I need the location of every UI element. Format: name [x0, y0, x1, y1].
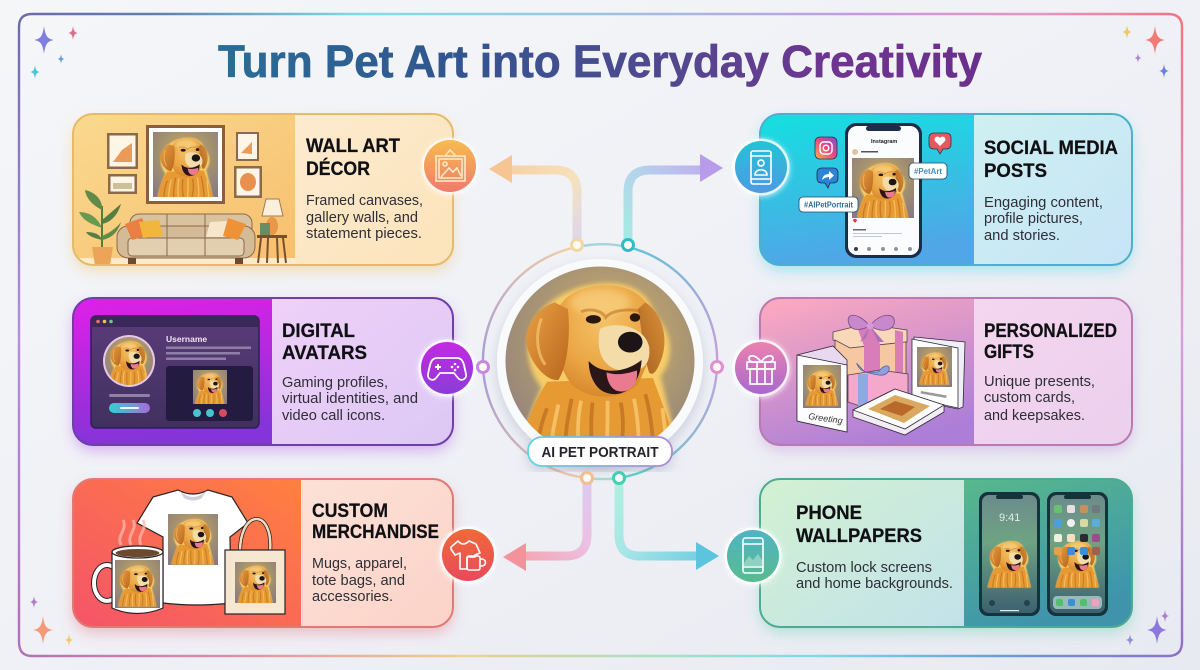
text: wall art decor: WALL ART	[306, 135, 400, 157]
panel: custom merchandise	[73, 479, 453, 627]
text: digital avatars: AVATARS	[282, 342, 367, 364]
lying photo book	[853, 389, 944, 435]
illustration: tote bag	[225, 519, 285, 614]
illustration: gifts, card and books	[797, 315, 965, 435]
hashtag bubble: PetArt	[909, 163, 947, 179]
text: personalized gifts: Unique presents,	[984, 374, 1095, 390]
text: social media posts: Engaging content,	[984, 195, 1103, 211]
icon: share bubble	[817, 168, 838, 188]
center label: AI PET PORTRAIT	[542, 445, 659, 461]
panel: personalized gifts	[760, 298, 1132, 445]
text: digital avatars: virtual identities, and	[282, 391, 418, 407]
icon: merchandise tee and mug	[440, 526, 496, 584]
icon: wall art picture frame	[422, 138, 478, 194]
illustration: gallery wall and living room	[79, 125, 287, 265]
text: social media posts: SOCIAL MEDIA	[984, 137, 1118, 159]
illustration: profile window	[91, 316, 259, 428]
text: digital avatars	[282, 320, 418, 424]
sofa	[117, 214, 255, 264]
text: custom merchandise: CUSTOM	[312, 500, 388, 522]
icon: instagram badge	[815, 137, 837, 159]
hashtag bubble: AIPetPortrait	[799, 197, 858, 212]
plant	[79, 190, 121, 265]
text: wall art decor: DÉCOR	[306, 157, 370, 180]
illustration: phone with social feed	[799, 123, 951, 258]
illustration: lock screen phone	[979, 492, 1040, 616]
text: phone wallpapers: WALLPAPERS	[796, 525, 922, 547]
decorative sparkles: top right	[1122, 25, 1169, 78]
text: wall art decor	[306, 135, 423, 242]
center orbit ring	[483, 244, 717, 479]
text: personalized gifts: and keepsakes.	[984, 408, 1085, 424]
panel: digital avatars	[73, 298, 453, 445]
upright photo book	[912, 337, 965, 409]
icon: digital avatars game controller	[418, 340, 476, 396]
illustration: t-shirt	[137, 490, 248, 605]
text: custom merchandise: MERCHANDISE	[312, 521, 439, 543]
illustration: lock screen phone: 9:41	[999, 512, 1020, 524]
dog portrait	[525, 280, 674, 436]
panel: social media posts	[760, 114, 1132, 265]
text: personalized gifts	[984, 320, 1117, 424]
lamp and side table	[257, 199, 287, 263]
text: custom merchandise: Mugs, apparel,	[312, 556, 407, 572]
icon: phone wallpaper	[724, 528, 782, 584]
arrow: center to social media	[628, 154, 723, 245]
arrow: center to wall art	[489, 155, 577, 245]
text: phone wallpapers	[796, 502, 953, 592]
text: custom merchandise: accessories.	[312, 589, 393, 605]
text: social media posts: and stories.	[984, 228, 1060, 244]
icon: gift box	[732, 340, 790, 396]
text: digital avatars: DIGITAL	[282, 320, 355, 342]
icon: heart bubble	[929, 133, 951, 154]
text: custom merchandise	[312, 500, 439, 605]
center portrait medallion	[497, 259, 703, 465]
decorative sparkles: top left	[30, 26, 78, 79]
text: wall art decor: Framed canvases,	[306, 193, 423, 209]
large framed dog portrait	[146, 125, 225, 204]
arrow: center to phone wallpapers	[619, 478, 719, 570]
hashtag bubble: PetArt: #PetArt	[914, 167, 942, 176]
panel: wall art decor	[73, 114, 453, 265]
text: digital avatars: Gaming profiles,	[282, 375, 388, 391]
text: phone wallpapers: PHONE	[796, 502, 862, 524]
avatar	[103, 335, 155, 387]
center label	[528, 437, 672, 466]
greeting card: Greeting	[808, 411, 843, 426]
decorative sparkles: bottom left	[30, 596, 73, 646]
arrow: center to custom merchandise	[503, 478, 587, 571]
text: social media posts: profile pictures,	[984, 211, 1083, 227]
small gift box	[848, 364, 908, 408]
text: social media posts	[984, 137, 1118, 244]
illustration: profile window: Username	[166, 334, 207, 344]
text: wall art decor: statement pieces.	[306, 226, 422, 242]
text: social media posts: POSTS	[984, 160, 1047, 182]
text: wall art decor: gallery walls, and	[306, 210, 418, 226]
illustration: phone with social feed: Instagram	[871, 139, 897, 145]
text: personalized gifts: custom cards,	[984, 390, 1075, 406]
greeting card	[797, 346, 847, 432]
large gift box	[833, 315, 907, 378]
hashtag bubble: AIPetPortrait: #AIPetPortrait	[804, 200, 853, 210]
icon: social media phone with person	[732, 138, 790, 196]
text: custom merchandise: tote bags, and	[312, 573, 405, 589]
text: personalized gifts: PERSONALIZED	[984, 320, 1117, 342]
text: phone wallpapers: Custom lock screens	[796, 560, 932, 576]
text: digital avatars: video call icons.	[282, 408, 385, 424]
illustration: home screen phone	[1047, 492, 1108, 616]
decorative sparkles: bottom right	[1126, 610, 1169, 646]
video call pane	[166, 366, 253, 421]
illustration: coffee mug	[94, 520, 163, 614]
text: phone wallpapers: and home backgrounds.	[796, 576, 953, 592]
panel: phone wallpapers	[760, 479, 1132, 627]
title: Turn Pet Art into Everyday Creativity	[218, 36, 982, 87]
connector nodes	[478, 240, 722, 484]
text: personalized gifts: GIFTS	[984, 341, 1034, 363]
